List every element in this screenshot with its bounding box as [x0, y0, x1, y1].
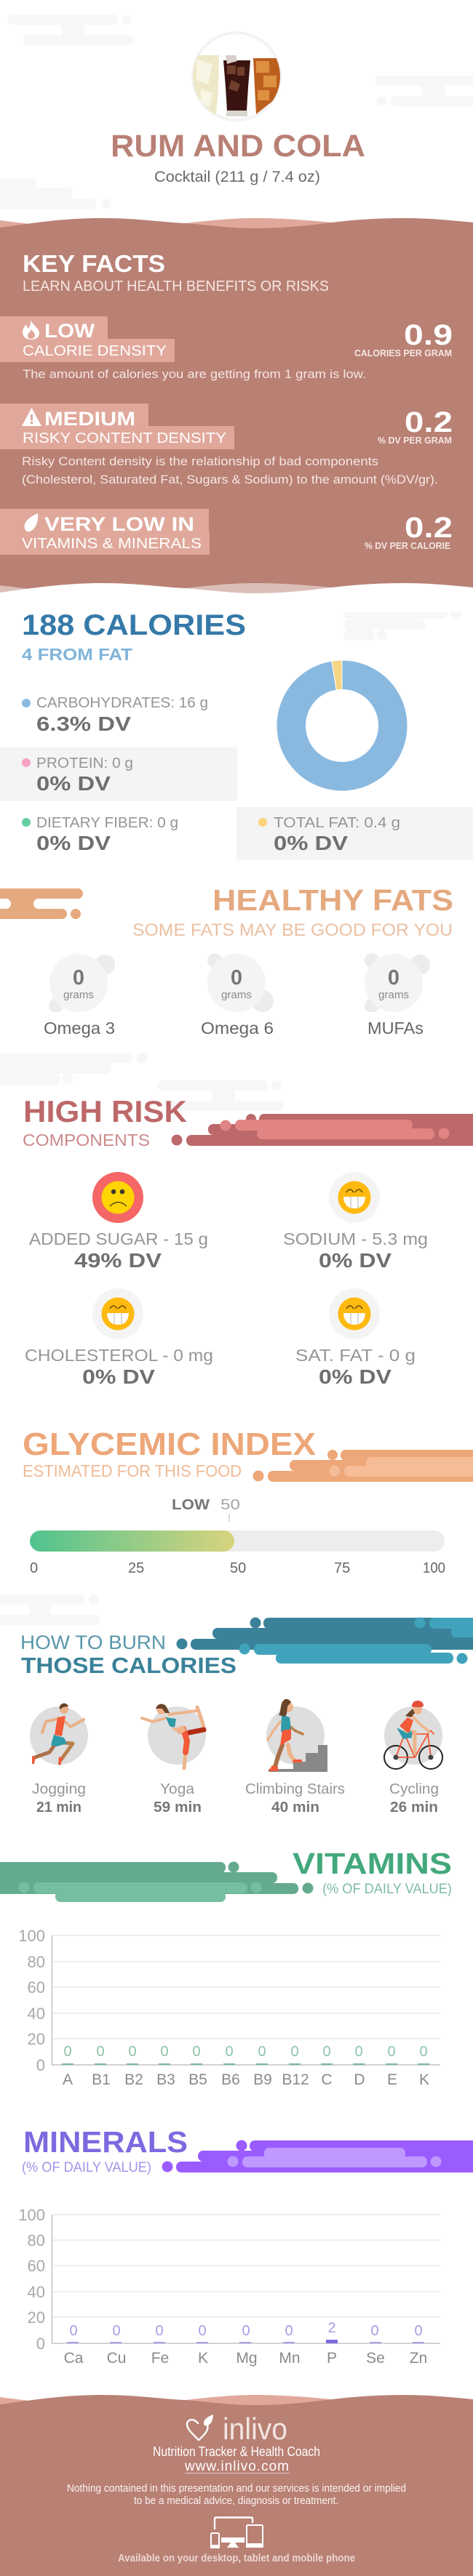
risky description: [22, 454, 438, 486]
macro: total fat: TOTAL FAT: 0.4 g: [274, 815, 400, 831]
minerals bar chart: 0: [370, 2323, 379, 2339]
glycemic gauge: 50: [230, 1560, 246, 1576]
vitamins bar chart: A: [63, 2071, 73, 2088]
glycemic index subheading: ESTIMATED FOR THIS FOOD: [23, 1461, 242, 1480]
glycemic gauge: 25: [128, 1560, 144, 1576]
glycemic value label: [172, 1497, 240, 1522]
burn heading: [20, 1632, 236, 1678]
risk: sodium: 0% DV: [319, 1249, 391, 1272]
vitamins bar chart: 80: [28, 1953, 45, 1971]
fat: mufas: MUFAs: [367, 1019, 424, 1038]
icon: happy face: [338, 1297, 371, 1331]
glycemic gauge: 75: [334, 1560, 350, 1576]
vitamins bar chart: D: [354, 2071, 365, 2088]
fact: vitamins and minerals: [0, 509, 453, 555]
vitamins bar chart: 0: [419, 2044, 428, 2060]
low label: LOW: [44, 320, 95, 342]
vitamins bar chart: 40: [28, 2005, 45, 2023]
activity: jogging: Jogging: [32, 1781, 86, 1797]
risky value: 0.2: [405, 406, 453, 438]
macro: dietary fiber: 0% DV: [36, 832, 111, 854]
vitamins bar chart: 0: [36, 2056, 45, 2074]
macro: carbohydrates: 6.3% DV: [36, 713, 131, 735]
macro: total fat: [236, 807, 473, 860]
vitamins bar chart: 0: [225, 2044, 234, 2060]
vitamins bar chart: 100: [18, 1927, 45, 1945]
glycemic gauge: [30, 1530, 445, 1576]
activity: climbing stairs: 40 min: [271, 1799, 319, 1815]
decoration: glycemic index: [253, 1450, 473, 1482]
minerals subheading: (% OF DAILY VALUE): [22, 2160, 151, 2175]
medium label: MEDIUM: [44, 408, 135, 430]
vitamins bar chart: B1: [92, 2071, 111, 2088]
minerals bar chart: P: [327, 2350, 337, 2367]
minerals bar chart: 2: [327, 2320, 336, 2336]
calorie density unit: CALORIES PER GRAM: [354, 348, 452, 358]
minerals bar chart: Fe: [151, 2350, 169, 2367]
activity: cycling: [384, 1701, 442, 1815]
macro: carbohydrates: [22, 695, 208, 735]
macro: dietary fiber: [22, 815, 178, 854]
calorie density value: 0.9: [404, 319, 453, 351]
high risk subheading: COMPONENTS: [23, 1131, 150, 1149]
macro: protein: PROTEIN: 0 g: [36, 755, 133, 771]
glycemic value label: 50: [220, 1497, 240, 1513]
vitamins bar chart: B3: [156, 2071, 175, 2088]
activity: yoga: [142, 1704, 206, 1815]
risk: sodium: [283, 1172, 428, 1272]
macro: dietary fiber: DIETARY FIBER: 0 g: [36, 815, 178, 831]
vitamins bar chart: 0: [258, 2044, 266, 2060]
fact: calorie density: [0, 316, 453, 381]
icon: inlivo heart logo: [187, 2415, 213, 2440]
minerals bar chart: Se: [366, 2350, 385, 2367]
fat: omega 6: Omega 6: [201, 1019, 274, 1038]
risk: saturated fat: [295, 1288, 416, 1388]
minerals bar chart: 0: [36, 2335, 45, 2353]
vitamins bar chart: 0: [63, 2044, 72, 2060]
minerals bar chart: 20: [28, 2308, 45, 2327]
minerals heading: MINERALS: [23, 2125, 188, 2159]
vitamins and minerals label: VITAMINS & MINERALS: [22, 536, 202, 552]
donut chart: [277, 660, 408, 791]
glycemic gauge: 100: [423, 1560, 445, 1576]
brand name: inlivo: [223, 2412, 287, 2446]
decoration: vitamins: [0, 1861, 313, 1902]
fat: omega 6: [201, 953, 274, 1038]
risky description: Risky Content density is the relationship of bad components: [22, 454, 378, 468]
burn heading: THOSE CALORIES: [21, 1653, 236, 1678]
vitamins bar chart: 0: [96, 2044, 105, 2060]
calorie density label: CALORIE DENSITY: [23, 343, 167, 359]
availability note: Available on your desktop, tablet and mobile phone: [118, 2552, 355, 2564]
vitamins bar chart: 0: [192, 2044, 201, 2060]
key facts heading: KEY FACTS: [23, 250, 165, 277]
activity: cycling: Cycling: [389, 1781, 439, 1797]
vitamins bar chart: 0: [290, 2044, 299, 2060]
vitamins bar chart: 20: [28, 2030, 45, 2048]
panel: key facts: [0, 218, 473, 612]
vitamins bar chart: 0: [160, 2044, 169, 2060]
vitamins bar chart: 0: [354, 2044, 363, 2060]
risk: cholesterol: CHOLESTEROL - 0 mg: [25, 1346, 213, 1365]
minerals bar chart: Ca: [64, 2350, 84, 2367]
title: RUM AND COLA: [111, 129, 365, 164]
minerals bar chart: 40: [28, 2283, 45, 2301]
macro: carbohydrates: CARBOHYDRATES: 16 g: [36, 695, 208, 711]
very low label: VERY LOW IN: [44, 513, 194, 535]
subtitle: Cocktail (211 g / 7.4 oz): [154, 169, 320, 185]
risk: sodium: SODIUM - 5.3 mg: [283, 1229, 428, 1248]
icon: devices: [210, 2517, 263, 2548]
vitamins heading: VITAMINS: [293, 1847, 452, 1880]
icon: warning triangle: [22, 408, 41, 426]
calories heading: 188 CALORIES: [22, 609, 246, 641]
risk: saturated fat: SAT. FAT - 0 g: [295, 1346, 416, 1365]
disclaimer: to be a medical advice, diagnosis or treatment.: [134, 2495, 338, 2507]
fat: mufas: 0: [388, 966, 400, 990]
minerals bar chart: 0: [242, 2323, 250, 2339]
minerals bar chart: 0: [112, 2323, 121, 2339]
fat: omega 3: 0: [73, 966, 84, 990]
vitamins bar chart: B9: [253, 2071, 272, 2088]
decoration: minerals: [162, 2140, 473, 2172]
minerals bar chart: Mn: [279, 2350, 301, 2367]
tagline: Nutrition Tracker & Health Coach: [153, 2444, 320, 2459]
disclaimer: [67, 2483, 406, 2507]
glycemic value label: LOW: [172, 1497, 210, 1513]
minerals bar chart: 100: [18, 2206, 45, 2224]
vitamins bar chart: B2: [124, 2071, 143, 2088]
minerals bar chart: K: [198, 2350, 208, 2367]
minerals bar chart: 0: [69, 2323, 78, 2339]
minerals bar chart: Mg: [236, 2350, 258, 2367]
calorie density description: The amount of calories you are getting from 1 gram is low.: [23, 367, 366, 381]
fat: omega 6: grams: [221, 989, 252, 1001]
minerals bar chart: Zn: [410, 2350, 427, 2367]
vitamins bar chart: C: [321, 2071, 333, 2088]
vitamins value: 0.2: [405, 512, 453, 544]
minerals bar chart: 80: [28, 2231, 45, 2250]
vitamins bar chart: [18, 1927, 440, 2088]
macro: protein: 0% DV: [36, 772, 111, 795]
vitamins bar chart: B12: [282, 2071, 309, 2088]
activity: cycling: 26 min: [390, 1799, 438, 1815]
minerals bar chart: 0: [155, 2323, 164, 2339]
disclaimer: Nothing contained in this presentation and our services is intended or implied: [67, 2483, 406, 2495]
calories from fat: 4 FROM FAT: [22, 645, 132, 664]
glycemic gauge: 0: [30, 1560, 38, 1576]
vitamins bar chart: K: [419, 2071, 429, 2088]
minerals bar chart: 0: [414, 2323, 423, 2339]
vitamins subheading: (% OF DAILY VALUE): [322, 1882, 452, 1897]
risk: cholesterol: [25, 1288, 213, 1388]
vitamins bar chart: B6: [221, 2071, 240, 2088]
minerals bar chart: [18, 2206, 440, 2367]
icon: flame: [23, 320, 39, 340]
decoration: high risk: [172, 1114, 473, 1146]
food photo: three cocktail glasses in a circle: [192, 33, 281, 120]
glycemic index heading: GLYCEMIC INDEX: [23, 1427, 316, 1462]
minerals bar chart: Cu: [107, 2350, 126, 2367]
minerals bar chart: 0: [198, 2323, 207, 2339]
vitamins bar chart: B5: [188, 2071, 207, 2088]
fat: mufas: grams: [378, 989, 409, 1001]
burn heading: HOW TO BURN: [20, 1632, 166, 1653]
healthy fats subheading: SOME FATS MAY BE GOOD FOR YOU: [132, 920, 453, 940]
fat: omega 3: grams: [63, 989, 94, 1001]
vitamins bar chart: E: [387, 2071, 397, 2088]
risk: added sugar: ADDED SUGAR - 15 g: [29, 1229, 208, 1248]
risk: cholesterol: 0% DV: [82, 1365, 155, 1388]
activity: jogging: [30, 1704, 88, 1815]
icon: leaf: [24, 513, 38, 531]
risk: added sugar: [29, 1172, 208, 1272]
vitamins bar chart: 0: [387, 2044, 396, 2060]
risk: added sugar: 49% DV: [74, 1249, 162, 1272]
activity: climbing stairs: [245, 1699, 345, 1815]
activity: jogging: 21 min: [36, 1799, 82, 1815]
website: www.inlivo.com: [184, 2459, 289, 2474]
minerals bar chart: 60: [28, 2257, 45, 2275]
vitamins bar chart: 60: [28, 1978, 45, 1997]
fact: risky content density: [0, 404, 453, 486]
icon: sad face: [102, 1181, 134, 1214]
fat: omega 3: [44, 954, 115, 1038]
minerals bar chart: 0: [285, 2323, 293, 2339]
fat: omega 3: Omega 3: [44, 1019, 115, 1038]
decoration: burn calories: [176, 1617, 473, 1664]
fat: mufas: [365, 953, 430, 1038]
icon: happy face: [338, 1181, 371, 1214]
activity: yoga: 59 min: [154, 1799, 202, 1815]
macro: protein: [0, 747, 237, 801]
risky description: (Cholesterol, Saturated Fat, Sugars & Sodium) to the amount (%DV/gr).: [22, 473, 438, 486]
activity: yoga: Yoga: [160, 1781, 195, 1797]
decoration: healthy fats: [0, 888, 83, 919]
icon: happy face: [102, 1297, 134, 1331]
risky content density label: RISKY CONTENT DENSITY: [23, 430, 226, 446]
footer panel: [0, 2395, 473, 2576]
healthy fats heading: HEALTHY FATS: [212, 883, 453, 917]
background clouds: [0, 15, 473, 1625]
vitamins bar chart: 0: [322, 2044, 331, 2060]
key facts subheading: LEARN ABOUT HEALTH BENEFITS OR RISKS: [23, 278, 329, 294]
activity: climbing stairs: Climbing Stairs: [245, 1781, 345, 1797]
vitamins bar chart: 0: [128, 2044, 137, 2060]
high risk heading: HIGH RISK: [23, 1094, 187, 1128]
risk: saturated fat: 0% DV: [319, 1365, 391, 1388]
macro: total fat: 0% DV: [274, 832, 348, 854]
vitamins unit: % DV PER CALORIE: [365, 540, 450, 551]
fat: omega 6: 0: [231, 966, 242, 990]
risky unit: % DV PER GRAM: [378, 435, 452, 446]
